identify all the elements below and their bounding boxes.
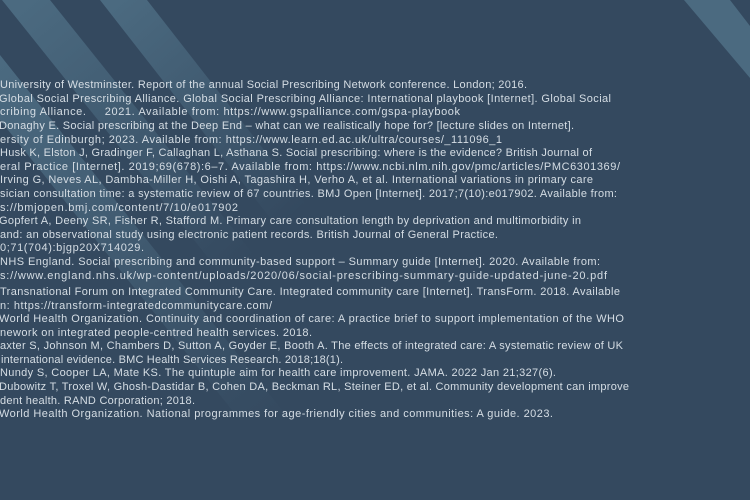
reference: Husk [0,147,621,173]
reference: Global Social Prescribing Alliance: Global Social Prescribing Alliance. Global Social Prescribing Alliance: International playbook [Internet]. Global Social [0,93,611,105]
reference: NHS England: NHS England. Social prescribing and community-based support – Summary guide [Internet]. 2020. Available from: [0,256,600,268]
reference: Donaghy: ersity of Edinburgh; 2023. Available from: https://www.learn.ed.ac.uk/ultra/courses/_111096_1 [0,134,502,146]
reference: Transnational Forum [0,286,620,312]
reference: Dubowitz: dent health. RAND Corporation; 2018. [0,395,195,407]
reference: Irving: sician consultation time: a systematic review of 67 countries. BMJ Open [Internet]. 2017;7(10):e017902. Available from: [0,188,617,200]
reference: Irving [0,174,617,214]
reference: WHO age-friendly: World Health Organization. National programmes for age-friendly cities and communities: A guide. 2023. [0,408,553,420]
reference: Irving: Irving G, Neves AL, Dambha-Miller H, Oishi A, Tagashira H, Verho A, et al. International variations in primary care [0,174,593,186]
reference: WHO continuity [0,313,624,339]
reference: Donaghy [0,120,574,146]
reference: Gopfert: Gopfert A, Deeny SR, Fisher R, Stafford M. Primary care consultation length by deprivation and multimorbidity in [0,215,581,227]
reference: NHS England [0,256,608,282]
reference list [0,79,629,420]
reference: Husk: Husk K, Elston J, Gradinger F, Callaghan L, Asthana S. Social prescribing: where is the evidence? British Journal of [0,147,593,159]
reference: Donaghy: Donaghy E. Social prescribing at the Deep End – what can we realistically hope for? [lecture slides on Internet]. [0,120,574,132]
reference: Irving: s://bmjopen.bmj.com/content/7/10/e017902 [0,202,238,214]
reference: Baxter: international evidence. BMC Health Services Research. 2018;18(1). [1,354,343,366]
reference: Gopfert: 0;71(704):bjgp20X714029. [0,242,144,254]
reference: University of Westminster: University of Westminster. Report of the annual Social Prescribing Network conference. London; 2016. [0,79,527,91]
reference: WHO continuity: World Health Organization. Continuity and coordination of care: A practice brief to support implementation of the WHO [0,313,624,325]
reference: Dubowitz: Dubowitz T, Troxel W, Ghosh-Dastidar B, Cohen DA, Beckman RL, Steiner ED, et al. Community development can improve [0,381,629,393]
reference: Global Social Prescribing Alliance [0,93,611,118]
reference: WHO continuity: nework on integrated people-centred health services. 2018. [0,327,312,339]
reference: Baxter: axter S, Johnson M, Chambers D, Sutton A, Goyder E, Booth A. The effects of integrated care: A systematic review of UK [0,340,624,352]
reference: Baxter [0,340,624,366]
reference: Global Social Prescribing Alliance: cribing Alliance. 2021. Available from: https://www.gspalliance.com/gspa-playbook [0,106,461,118]
reference: Husk: eral Practice [Internet]. 2019;69(678):6–7. Available from: https://www.ncbi.nlm.nih.gov/pmc/articles/PMC6301369/ [0,161,621,173]
reference: Gopfert: and: an observational study using electronic patient records. British Journal of General Practice. [0,229,498,241]
reference: Dubowitz [0,381,629,407]
reference: Nundy: Nundy S, Cooper LA, Mate KS. The quintuple aim for health care improvement. JAMA. 2022 Jan 21;327(6). [0,367,556,379]
reference: Gopfert [0,215,581,254]
reference: Transnational Forum: Transnational Forum on Integrated Community Care. Integrated community care [Internet]. TransForm. 2018. Available [0,286,620,298]
reference: Transnational Forum: n: https://transform-integratedcommunitycare.com/ [0,300,273,312]
reference: NHS England: s://www.england.nhs.uk/wp-content/uploads/2020/06/social-prescribing-summary-guide-updated-june-20.pdf [0,270,608,282]
